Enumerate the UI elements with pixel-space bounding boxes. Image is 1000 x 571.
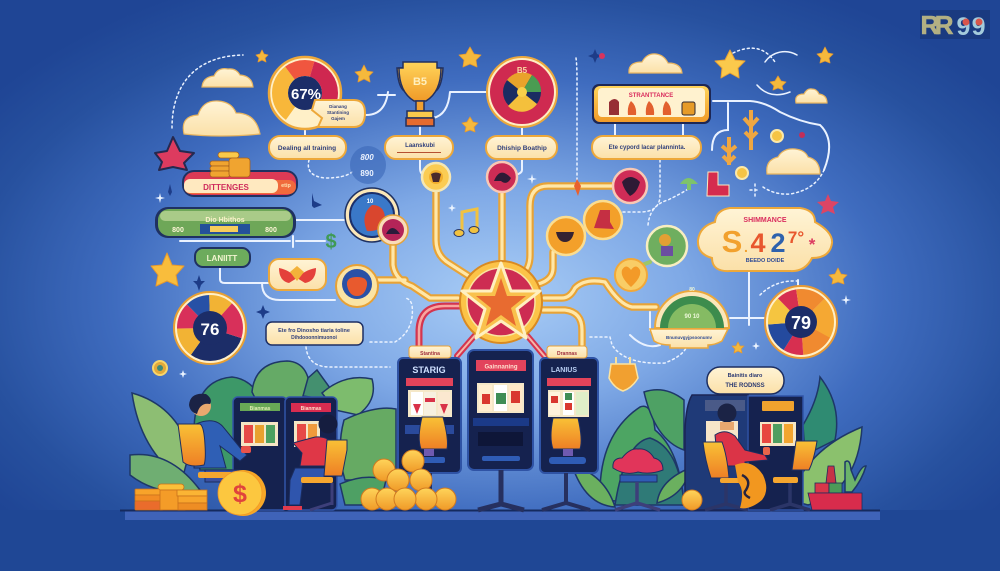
callout: gauge note: Gajem <box>331 116 345 121</box>
chair: right empty <box>770 441 817 510</box>
pill: lanmark label <box>385 136 453 159</box>
base with caption <box>650 329 728 348</box>
star: crimson right <box>817 194 839 214</box>
data values near dial: 800 <box>360 153 374 162</box>
callout cloud: S.427: BEEDO DOIDE <box>746 258 785 264</box>
star: gold top right <box>715 50 745 78</box>
progress bar: red with coins <box>182 152 298 197</box>
cloud: right medium <box>767 149 820 174</box>
leaf: big right of machines <box>340 408 396 480</box>
icon: dollar glyph: $ <box>325 231 337 253</box>
stats box with icons <box>592 84 711 124</box>
node: crimson top centre <box>487 162 517 192</box>
icons: right side cluster <box>680 110 758 196</box>
node: turkey emblem <box>336 265 378 307</box>
wing badge <box>269 259 326 290</box>
progress bar: green: Dio Hbithos <box>205 217 245 224</box>
pill: green button <box>195 248 250 267</box>
logo: RR99 <box>920 10 990 41</box>
node: orange figure <box>584 201 622 239</box>
background foliage <box>130 361 866 507</box>
person: right player on chair <box>703 404 770 510</box>
clouds <box>183 54 827 174</box>
icon: gold tree lower <box>722 137 736 165</box>
gauge: 79: 79 <box>791 313 811 333</box>
machine: green header: Bianmas <box>250 406 271 412</box>
seat <box>419 417 448 449</box>
green semicircle gauge: Bnunuvgyjpsoonumv <box>666 335 712 340</box>
callout: gauge note <box>312 100 365 127</box>
leaf: right upper <box>803 377 837 455</box>
callout: upper right of machines: Bainitis diaro <box>728 373 763 379</box>
trophy <box>397 62 443 126</box>
leaf: top centre <box>252 361 310 400</box>
pill: display label <box>486 136 557 159</box>
star: large gold left <box>151 253 184 286</box>
star: gold small group <box>256 47 847 353</box>
gauge: 67%: 67% <box>291 86 321 103</box>
icon: gold tree top <box>744 110 758 150</box>
leaf: bush left <box>194 377 272 470</box>
node: heart <box>615 259 647 291</box>
slot machine: LANIUS: Drannas <box>557 351 577 357</box>
callout: lower left note: Dihdooonnimuonoi <box>291 335 338 341</box>
callout cloud: S.427: 2 <box>770 228 786 258</box>
slot machine: centre: Gainnaning <box>484 364 518 370</box>
wheel gauge: top centre <box>487 57 557 127</box>
star: large crimson <box>155 137 194 170</box>
seat <box>551 418 581 449</box>
golden connector network <box>378 186 656 358</box>
gauge: 76: 76 <box>201 320 219 339</box>
pill: stats label <box>592 136 701 159</box>
data values near dial: 890 <box>360 169 374 178</box>
callout: lower left note <box>266 322 363 345</box>
pill: dealing label <box>269 136 346 159</box>
progress bar: green <box>155 207 296 238</box>
green semicircle gauge <box>650 287 729 348</box>
person: middle player on chair <box>283 414 347 510</box>
stars scattered <box>151 47 851 378</box>
callout cloud: S.427: SHIMMANCE <box>743 217 787 224</box>
leaf: top right <box>322 378 373 415</box>
slot machine: STARIG <box>398 346 461 505</box>
pill: lanmark label: Laanskubi <box>405 143 435 149</box>
logo: RR99: RR <box>920 10 954 40</box>
gauge: 79 <box>765 286 837 358</box>
pill: display label: Dhiship Boathip <box>497 145 547 152</box>
node: green figure <box>647 226 687 266</box>
data values near dial <box>350 146 386 184</box>
green semicircle gauge: 90 10 <box>684 314 700 320</box>
slot machine: STARIG: Stantina <box>420 351 440 357</box>
node: crimson right of path <box>613 169 647 203</box>
coin: big dollar: $ <box>233 480 247 508</box>
logo: RR99: 99 <box>956 13 986 41</box>
slot machine: centre <box>468 350 533 510</box>
thin white and dashed connector lines <box>172 48 829 367</box>
orange blob <box>735 463 766 508</box>
wheel gauge: top centre: B5 <box>517 66 528 75</box>
stats box with icons: STRANTTANCE <box>629 93 673 99</box>
pill labels: top row <box>269 136 701 159</box>
cloud: top left small <box>202 69 253 87</box>
cloud: top centre right <box>629 54 682 73</box>
leaf: small right of stool <box>572 465 690 507</box>
slot machine: STARIG: STARIG <box>412 365 446 375</box>
cloud: right small <box>796 89 827 103</box>
progress bar: red with coins: etip <box>281 183 292 189</box>
icon: spark on connector <box>574 179 581 196</box>
slot machines: right pair <box>685 395 803 510</box>
sparkles <box>168 49 602 319</box>
small coins and flowers <box>771 130 783 142</box>
progress bar: red with coins: DITTENGES <box>203 183 250 192</box>
leaf: lower left <box>130 454 200 492</box>
icon: music note <box>454 209 479 236</box>
leaf: tall right centre <box>644 390 684 450</box>
progress bar: green: 800 <box>172 227 184 234</box>
node: red ring <box>378 215 408 245</box>
gauge: 76 <box>174 292 246 364</box>
trophy: B5 <box>413 76 427 88</box>
stool: red mushroom seat <box>613 449 663 510</box>
icon: coin stack <box>210 152 250 177</box>
icon: green spade <box>680 178 698 190</box>
cloud: left large <box>183 101 260 136</box>
callout cloud: S.427 <box>698 208 832 271</box>
coin pile <box>361 450 702 510</box>
dial gauge <box>345 188 408 245</box>
callout cloud: S.427: S <box>722 224 742 259</box>
node: gold top left <box>422 163 450 191</box>
leaf: right dome <box>600 406 684 505</box>
slot machine: LANIUS <box>540 346 598 510</box>
progress bar: green: 800 <box>265 227 277 234</box>
callout: upper right of machines <box>707 367 784 394</box>
callout cloud: S.427: 4 <box>750 228 766 258</box>
slot machine: LANIUS: LANIUS <box>551 367 577 374</box>
pill: stats label: Ete cypord lacar planninta. <box>609 145 686 151</box>
leaf: far left large <box>132 393 190 480</box>
central star emblem <box>460 261 542 343</box>
label tag <box>409 346 451 358</box>
floor band <box>0 510 1000 571</box>
slot machine: left small pair <box>233 397 337 510</box>
pill: green button: LANIITT <box>207 254 237 263</box>
plant stalks <box>845 461 866 492</box>
machine: red header: Bianmas <box>301 406 322 412</box>
callout: upper right of machines: THE RODNSS <box>725 383 765 389</box>
label tag <box>547 346 587 358</box>
pill: dealing label: Dealing all training <box>278 145 336 152</box>
leaf: right lower <box>790 427 862 505</box>
node: orange bowl <box>547 217 585 255</box>
gauge: 67% <box>269 57 365 129</box>
leaf: top centre dark <box>303 370 330 400</box>
dial gauge: 10 <box>367 199 374 205</box>
planter <box>808 466 862 510</box>
leaf: small by coins <box>340 477 386 505</box>
green semicircle gauge: 80 <box>689 287 695 293</box>
callout: lower left note: Ete fro Dinosho tiaria toline <box>278 328 350 334</box>
callout: gauge note: Dianang <box>329 104 347 109</box>
icon: orange shield <box>609 357 638 391</box>
person: left player on chair <box>178 394 251 508</box>
callout cloud: S.427: . <box>744 239 748 255</box>
callout: gauge note: Stantining <box>327 110 349 115</box>
callout cloud: S.427: 7° <box>788 228 804 247</box>
callout cloud: S.427: * <box>809 235 816 254</box>
icon: crimson boot <box>707 172 729 196</box>
coins: stack and big dollar coin <box>135 470 266 516</box>
